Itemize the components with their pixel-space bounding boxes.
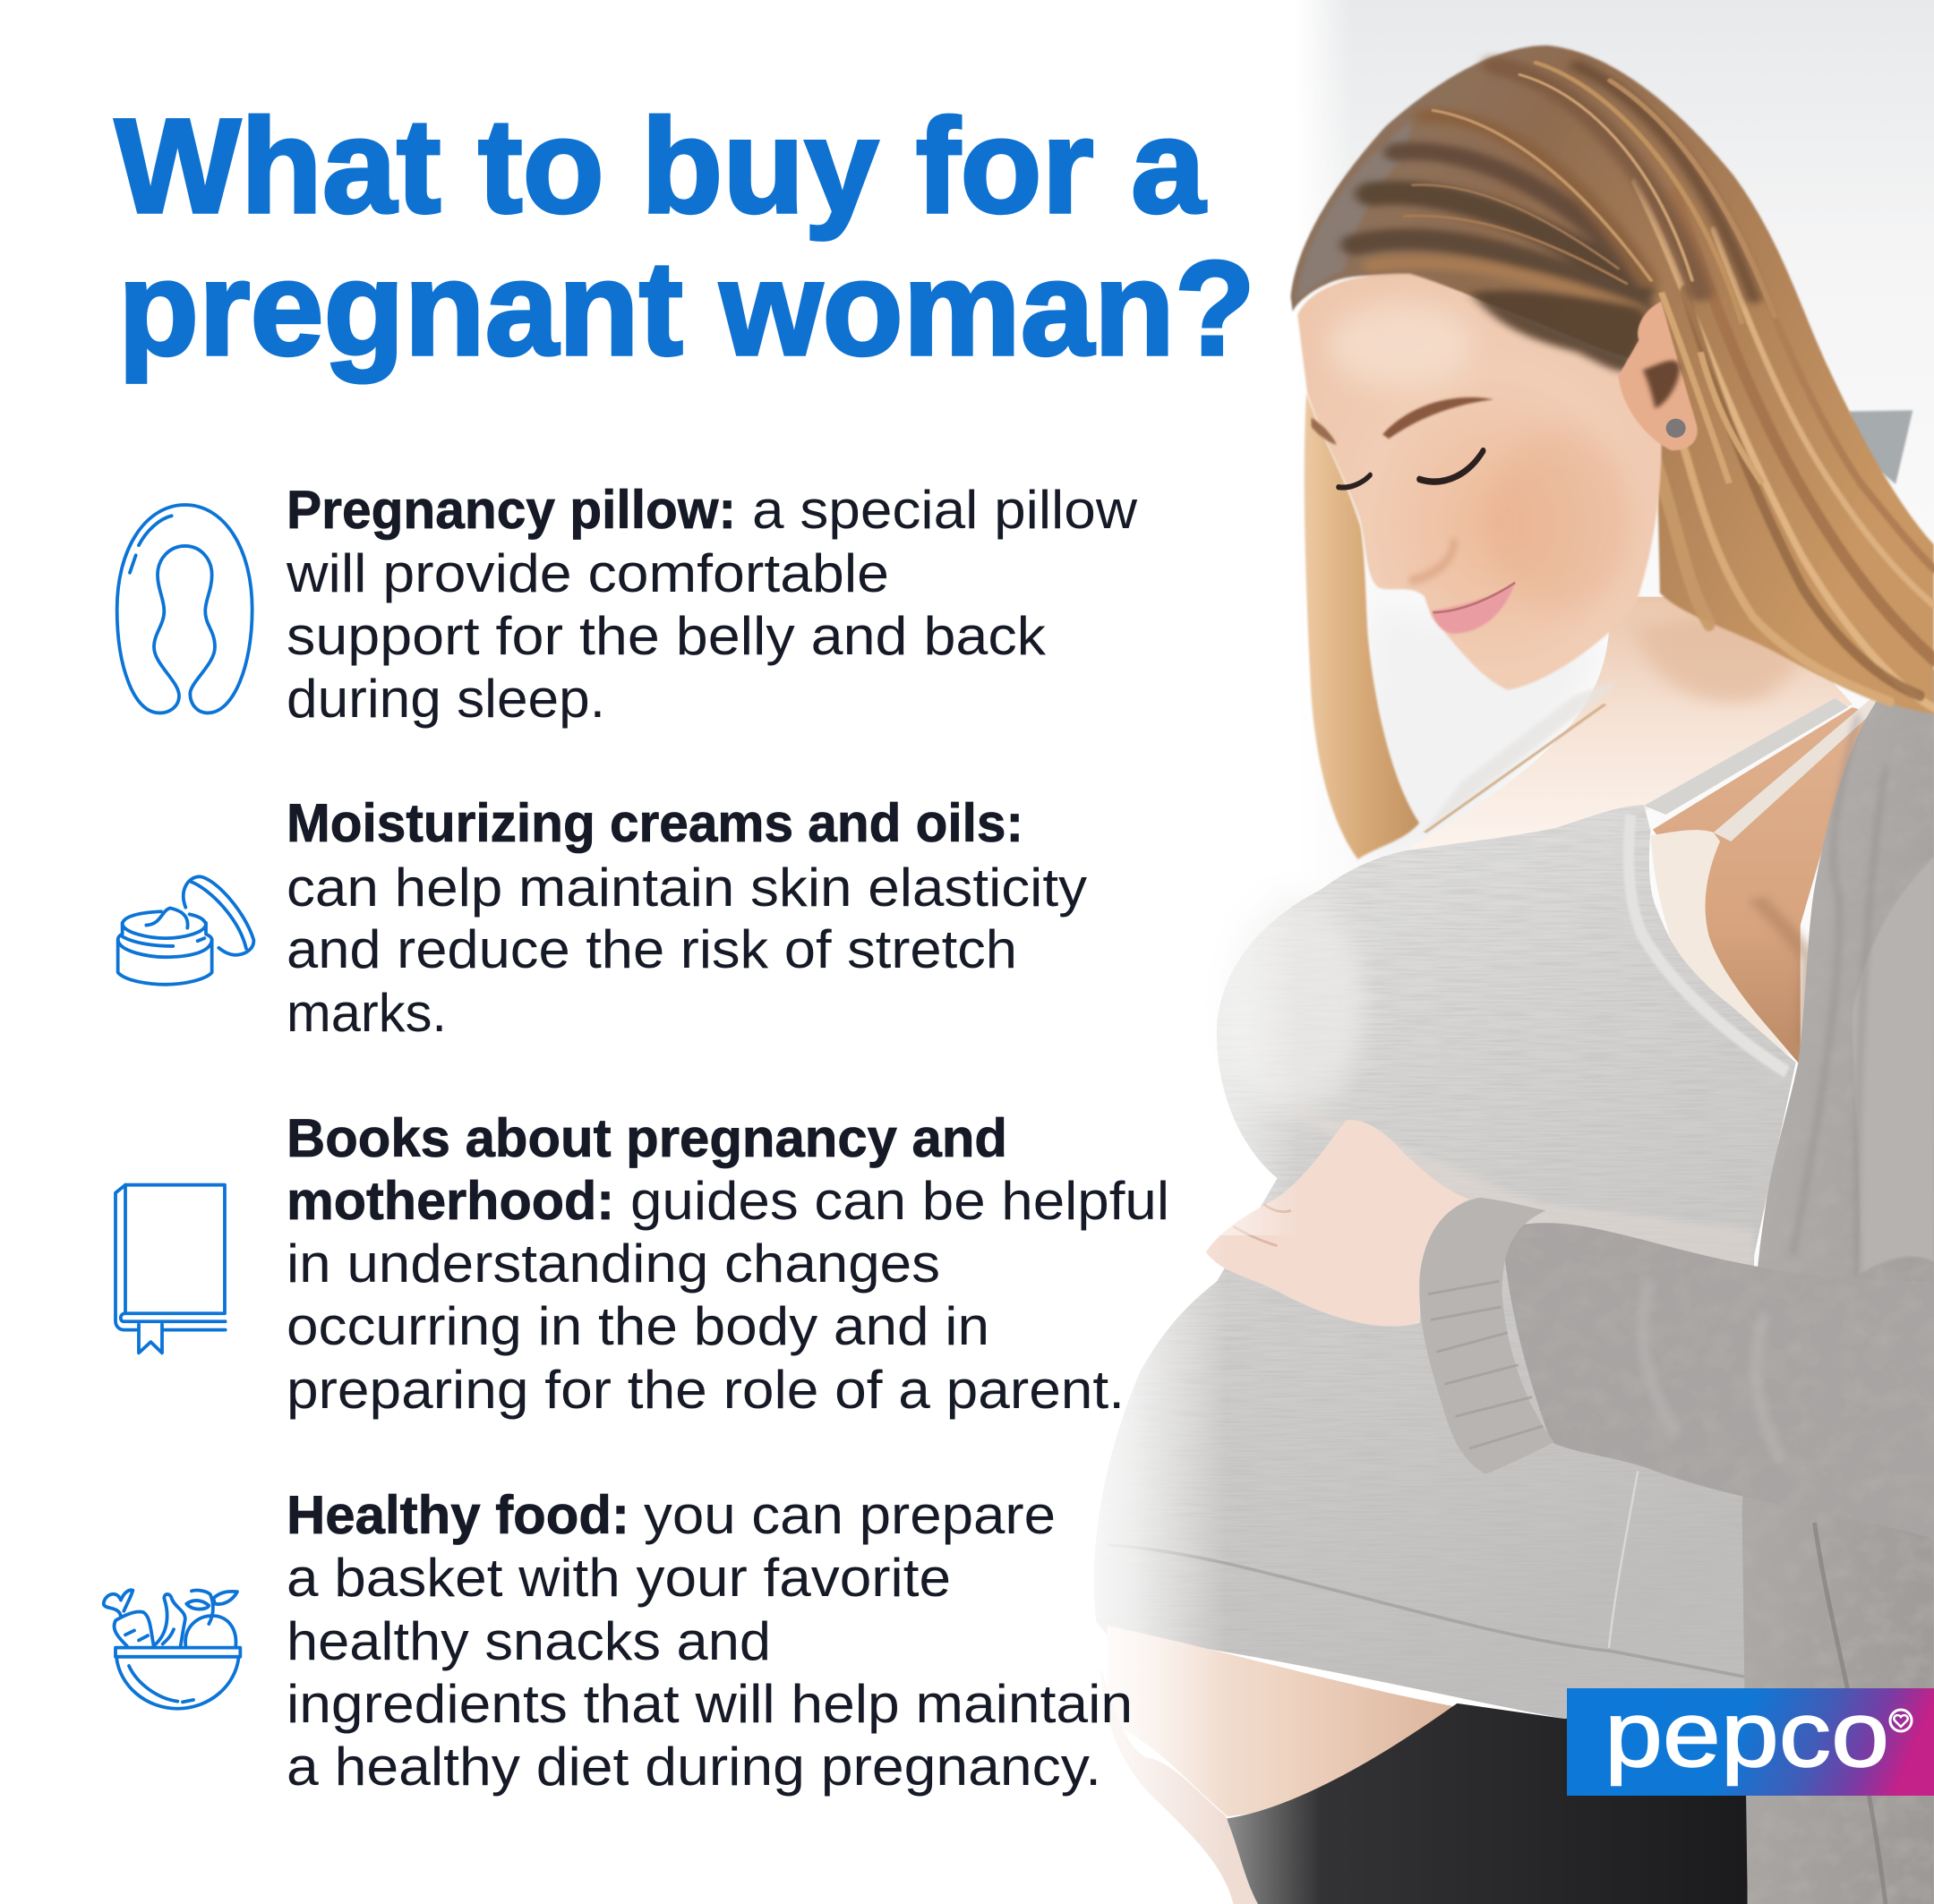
chest fold shadow bbox=[1757, 898, 1809, 1045]
sleeve highlight bbox=[1642, 1281, 1782, 1462]
ribbed cuff bbox=[1419, 1198, 1554, 1474]
knuckle and finger lines bbox=[1234, 1204, 1291, 1246]
grey crown bbox=[1296, 119, 1413, 302]
soft hair bands bbox=[1355, 65, 1754, 311]
text: books about pregnancy and motherhood: preparing for the role of a parent. bbox=[287, 1360, 1125, 1420]
cardigan sleeve bbox=[1502, 1223, 1934, 1539]
cream strap bbox=[1714, 692, 1892, 841]
eyelashes bbox=[1419, 451, 1483, 482]
far eyebrow bbox=[1312, 417, 1337, 445]
text: books about pregnancy and motherhood: Books about pregnancy and bbox=[287, 1108, 1007, 1168]
logo: pepco: pepco bbox=[1605, 1683, 1889, 1787]
torso and arm bbox=[1094, 670, 1934, 1904]
title: pregnant woman? bbox=[118, 233, 1255, 383]
text: pregnancy pillow: support for the belly and back bbox=[287, 606, 1047, 666]
deep chest skin bbox=[1653, 707, 1878, 1065]
logo: pepco bbox=[1567, 1683, 1934, 1796]
strands over ear bbox=[1662, 293, 1762, 483]
necklace bbox=[1425, 704, 1605, 832]
neck and upper chest bbox=[1406, 597, 1853, 850]
tank top bbox=[1094, 805, 1796, 1719]
backdrop object and glow bbox=[1360, 410, 1913, 859]
cuff ribbing bbox=[1428, 1281, 1543, 1448]
grey object behind hair bbox=[1849, 410, 1913, 484]
lips bbox=[1432, 583, 1515, 634]
shirt seam bbox=[1609, 1471, 1638, 1648]
text: books about pregnancy and motherhood: guides can be helpful bbox=[630, 1171, 1169, 1231]
cheek shading bbox=[1488, 430, 1635, 611]
neck, chest skin and straps bbox=[1406, 597, 1892, 1065]
cardigan fold shadow bbox=[1814, 1523, 1886, 1904]
head and long hair bbox=[1290, 46, 1934, 859]
under-bust shadow bbox=[1278, 1107, 1754, 1268]
inner ear bbox=[1643, 361, 1680, 409]
forehead highlight bbox=[1326, 303, 1473, 388]
icon: bowl of healthy food bbox=[104, 1590, 240, 1709]
text: pregnancy pillow: will provide comfortable bbox=[286, 543, 889, 603]
title: What to buy for a bbox=[115, 90, 1207, 241]
text: healthy food: you can prepare bbox=[644, 1485, 1056, 1545]
cream lace bra bbox=[1651, 830, 1792, 1056]
upper hair detail and ear bbox=[1296, 63, 1775, 483]
text: pregnancy pillow: a special pillow bbox=[752, 480, 1138, 540]
text: moisturizing creams and oils: can help maintain skin elasticity bbox=[287, 858, 1087, 918]
far strap bbox=[1421, 680, 1618, 835]
earring bbox=[1666, 419, 1686, 438]
long hair strands bbox=[1635, 182, 1934, 708]
cardigan collar fold bbox=[1793, 715, 1886, 1275]
icon: book bbox=[116, 1185, 226, 1353]
text: pregnancy pillow: during sleep. bbox=[287, 669, 605, 729]
tank neckline band bbox=[1629, 815, 1787, 1072]
text: books about pregnancy and motherhood: motherhood: bbox=[287, 1171, 614, 1231]
cardigan lighter panel bbox=[1853, 857, 1934, 1275]
text: books about pregnancy and motherhood: occurring in the body and in bbox=[287, 1296, 989, 1356]
fine hair highlights bbox=[1405, 63, 1775, 322]
text: books about pregnancy and motherhood bbox=[287, 1108, 1169, 1420]
text: books about pregnancy and motherhood: in understanding changes bbox=[287, 1234, 940, 1294]
left hair lock bbox=[1305, 393, 1419, 859]
eyebrow bbox=[1382, 397, 1494, 439]
far eyelashes bbox=[1339, 475, 1370, 488]
neck shadow bbox=[1636, 609, 1801, 703]
text: healthy food: Healthy food: bbox=[287, 1485, 629, 1545]
upper hand bbox=[1206, 1120, 1469, 1327]
icon: cream jar bbox=[118, 876, 253, 985]
bare belly bbox=[1108, 1626, 1459, 1816]
upper torso fade bbox=[1200, 850, 1298, 1235]
photo: pregnant woman bbox=[1057, 46, 1934, 1904]
text: pregnancy pillow bbox=[286, 480, 1138, 729]
lip line bbox=[1433, 583, 1515, 612]
icon: pregnancy pillow bbox=[117, 505, 252, 713]
text: healthy food: a basket with your favorite bbox=[287, 1548, 951, 1608]
shirt hem bbox=[1108, 1545, 1746, 1677]
hair mass bbox=[1290, 46, 1934, 714]
grey shoulder strap bbox=[1644, 698, 1848, 815]
text: healthy food: healthy snacks and bbox=[287, 1611, 771, 1671]
leggings bbox=[1227, 1688, 1748, 1904]
ear bbox=[1618, 302, 1698, 450]
cardigan body bbox=[1742, 670, 1934, 1904]
nose shading bbox=[1409, 539, 1454, 581]
bust light bbox=[1222, 895, 1365, 1114]
text: moisturizing creams and oils bbox=[287, 793, 1087, 1043]
dark hair at temple bbox=[1470, 291, 1651, 371]
text: moisturizing creams and oils: and reduce the risk of stretch bbox=[287, 919, 1017, 979]
face bbox=[1297, 273, 1662, 690]
text: pregnancy pillow: Pregnancy pillow: bbox=[287, 480, 736, 540]
lower hand bbox=[1100, 1668, 1258, 1904]
text: moisturizing creams and oils: Moisturizing creams and oils: bbox=[287, 793, 1023, 853]
text: healthy food: ingredients that will help maintain bbox=[287, 1674, 1133, 1734]
window glow behind neck bbox=[1360, 605, 1606, 859]
text: moisturizing creams and oils: marks. bbox=[287, 983, 447, 1043]
text: healthy food: a healthy diet during pregnancy. bbox=[287, 1737, 1101, 1797]
text: healthy food bbox=[287, 1485, 1133, 1797]
title bbox=[115, 90, 1255, 383]
left photo fade bbox=[1057, 1235, 1227, 1904]
